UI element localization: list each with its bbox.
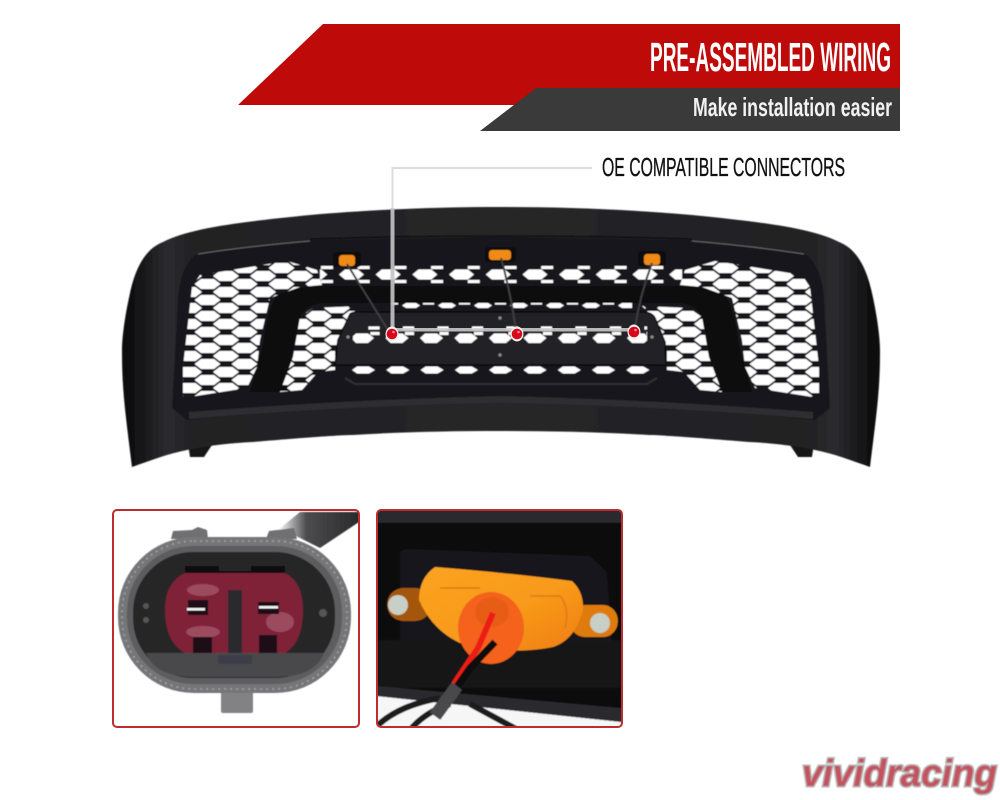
white area below the frame bbox=[377, 696, 622, 727]
leader line over grille bbox=[390, 208, 394, 332]
lower bumper lip bbox=[189, 396, 813, 419]
latch bbox=[218, 656, 252, 664]
outer mesh right bbox=[680, 261, 819, 398]
centre lamp bbox=[485, 247, 516, 262]
connector cavity bbox=[133, 552, 335, 678]
outer mesh left bbox=[183, 261, 322, 398]
left mounting tab bbox=[186, 430, 222, 457]
watermark logo: vividracing bbox=[802, 753, 997, 795]
leader line on white bbox=[392, 168, 592, 208]
lower mesh row bbox=[348, 364, 652, 376]
right screw bbox=[590, 613, 610, 633]
red title ribbon bbox=[238, 24, 900, 105]
panel border bbox=[113, 510, 359, 727]
red wire bbox=[454, 613, 493, 684]
inner mesh left bbox=[280, 306, 360, 392]
loose wires bbox=[378, 698, 518, 730]
red dot 3 bbox=[628, 324, 640, 340]
left ear bbox=[387, 588, 431, 621]
red dot 2 bbox=[510, 326, 524, 342]
side details bbox=[143, 603, 327, 623]
panel: amber lamp photo bbox=[377, 510, 622, 730]
horizontal highlight between dots bbox=[393, 328, 633, 332]
terminal pins bbox=[187, 606, 278, 610]
thin mesh row bbox=[392, 301, 632, 309]
grille shell bbox=[122, 207, 880, 467]
lamp lens bbox=[419, 567, 583, 651]
dark U frame left bbox=[250, 286, 752, 392]
callout label: OE COMPATIBLE CONNECTORS bbox=[602, 152, 845, 182]
header banner bbox=[238, 24, 900, 131]
centre panel bbox=[335, 312, 666, 365]
upper centre mesh band bbox=[320, 264, 682, 286]
terminal holes bbox=[188, 600, 279, 653]
panel border bbox=[377, 510, 622, 727]
lower mesh surround bbox=[345, 378, 657, 384]
maroon terminal block bbox=[165, 573, 303, 653]
heat shrink bbox=[435, 686, 457, 716]
red dot 1 bbox=[386, 326, 398, 342]
right lamp bbox=[638, 251, 666, 266]
block highlights bbox=[186, 584, 294, 638]
panel bolts bbox=[346, 316, 654, 357]
panel: connector photo bbox=[113, 510, 359, 727]
right mounting tab bbox=[780, 430, 816, 457]
top notches bbox=[185, 566, 285, 573]
inner recess bbox=[172, 237, 830, 420]
top trim highlight bbox=[198, 241, 804, 254]
connector tabs bbox=[171, 527, 297, 713]
connector housing bbox=[118, 537, 351, 693]
right ear bbox=[570, 605, 618, 637]
background bands bbox=[377, 510, 622, 523]
left screw bbox=[388, 595, 408, 615]
cable bbox=[278, 512, 359, 548]
callout: oe compatible connectors bbox=[386, 152, 845, 342]
centre panel mesh bbox=[353, 325, 647, 344]
inner mesh right bbox=[642, 306, 722, 392]
grey frame edge bbox=[377, 686, 622, 722]
grille illustration bbox=[122, 207, 880, 467]
lamp mounting plate bbox=[400, 549, 612, 643]
centre slot bbox=[228, 590, 242, 653]
wires bbox=[347, 258, 652, 330]
lens inset bbox=[440, 588, 567, 628]
brow line bbox=[310, 236, 692, 239]
left lamp bbox=[333, 252, 361, 267]
dark subtitle ribbon bbox=[480, 88, 900, 131]
subtitle: make installation easier: Make installation easier bbox=[693, 92, 892, 122]
black wire bbox=[456, 642, 495, 688]
round wire boss bbox=[458, 592, 524, 664]
